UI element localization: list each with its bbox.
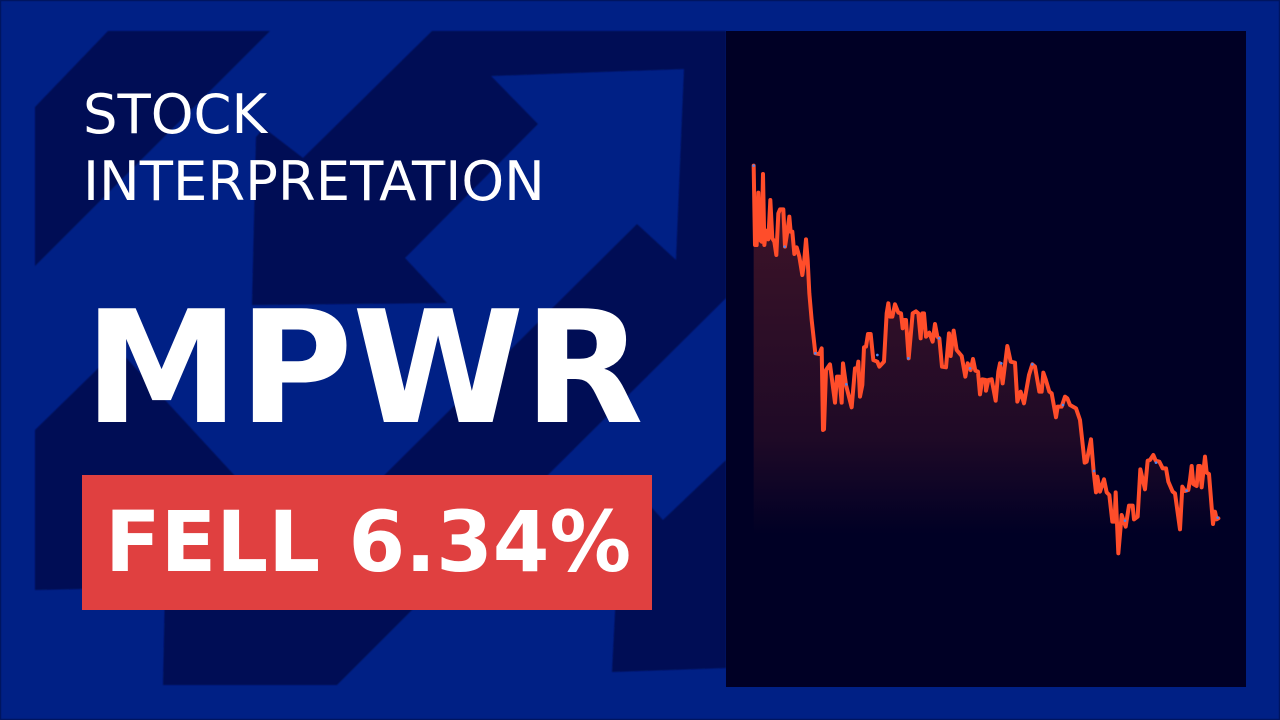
callout: fell 6.34%: [82, 475, 652, 610]
panel: price chart: [726, 31, 1246, 687]
data point markers: [752, 164, 1219, 522]
ticker: MPWR: MPWR: [84, 277, 643, 459]
callout: fell 6.34%: FELL 6.34%: [105, 493, 631, 591]
area under price line: [754, 166, 1218, 555]
title: stock interpretation: INTERPRETATION: [83, 150, 545, 213]
price line: [754, 166, 1218, 553]
title: stock interpretation: STOCK: [83, 83, 269, 146]
title: stock interpretation: [83, 83, 545, 213]
